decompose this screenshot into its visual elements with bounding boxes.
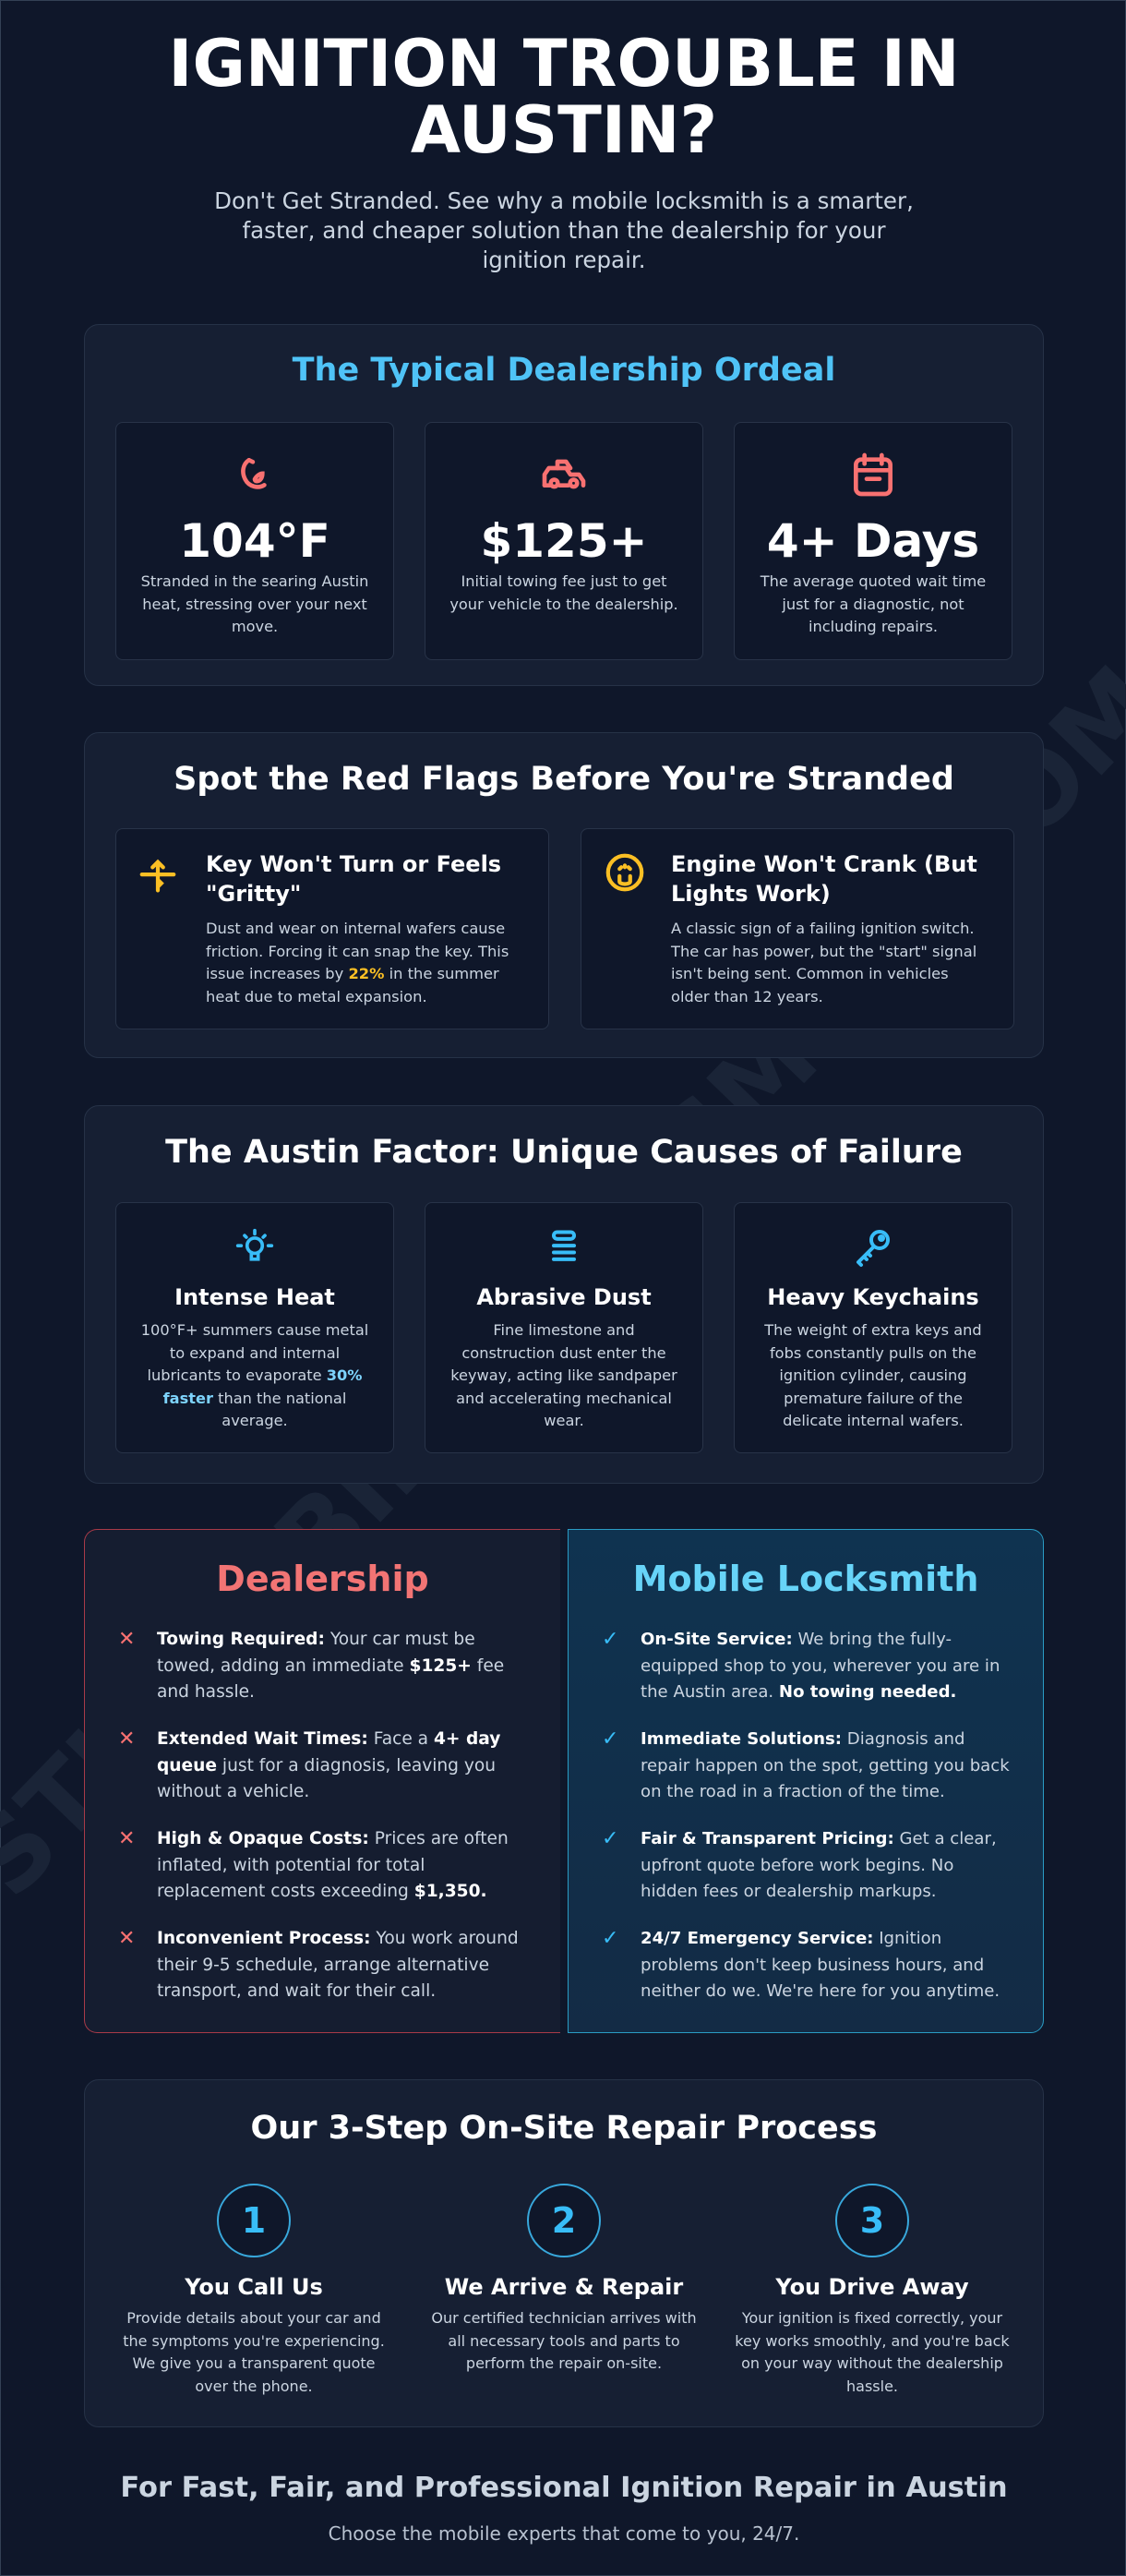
step 3 (735, 2184, 1010, 2395)
subtitle: Don't Get Stranded. See why a mobile locksmith is a smarter, faster, and cheaper solution than the dealership for your ignition repair. (214, 187, 914, 273)
text: Your ignition is fixed correctly, your key works smoothly, and you're back on your way without the dealership hassle. (735, 2309, 1010, 2395)
text: Stranded in the searing Austin heat, stressing over your next move. (141, 572, 368, 635)
icon: key turn (140, 859, 175, 892)
card: key won't turn (115, 828, 549, 1029)
card: keychains (734, 1202, 1012, 1453)
text: Dust and wear on internal wafers cause friction. Forcing it can snap the key. This issue increases by 22% in the summer heat due to metal expansion. (206, 920, 509, 1005)
item: towing: Towing Required: Your car must be towed, adding an immediate $125+ fee and hassle. (157, 1630, 504, 1702)
circle: 1 (217, 2184, 291, 2257)
card: engine won't crank (581, 828, 1014, 1029)
panel: mobile locksmith column (568, 1529, 1044, 2033)
item: wait: Extended Wait Times: Face a 4+ day queue just for a diagnosis, leaving you without a vehicle. (157, 1729, 500, 1801)
panel: dealership column: ✕ (118, 1628, 135, 1651)
step 1 (123, 2184, 385, 2395)
footer tagline: Choose the mobile experts that come to you, 24/7. (329, 2522, 799, 2545)
heading: dealership: Dealership (216, 1559, 429, 1599)
icon: tow truck (543, 460, 585, 489)
icon: calendar (854, 452, 892, 497)
heading: process: Our 3-Step On-Site Repair Process (251, 2110, 877, 2147)
item: immediate: Immediate Solutions: Diagnosis and repair happen on the spot, getting you back on the road in a fraction of the time. (641, 1729, 1010, 1801)
icon: flame (241, 458, 267, 489)
heading: Engine Won't Crank (But Lights Work) (671, 851, 977, 907)
heading: Intense Heat (174, 1284, 335, 1310)
circle: 2: 2 (552, 2200, 576, 2241)
text: Initial towing fee just to get your vehicle to the dealership. (449, 572, 678, 613)
text: 100°F+ summers cause metal to expand and internal lubricants to evaporate 30% faster than the national average. (141, 1321, 368, 1429)
item: on-site: On-Site Service: We bring the fully-equipped shop to you, wherever you are in the Austin area. No towing needed. (641, 1630, 1000, 1702)
panel: dealership column: ✕ (118, 1927, 135, 1950)
title: AUSTIN? (411, 92, 717, 168)
card: towing (425, 422, 703, 660)
panel: dealership column (84, 1529, 560, 2033)
stat: $125+: $125+ (480, 514, 648, 568)
heading: Abrasive Dust (476, 1284, 652, 1310)
heading: austin factor: The Austin Factor: Unique Causes of Failure (165, 1134, 963, 1171)
panel: mobile locksmith column: ✓ (602, 1827, 618, 1850)
text: Provide details about your car and the symptoms you're experiencing. We give you a transparent quote over the phone. (123, 2309, 385, 2395)
panel: red flags (84, 732, 1044, 1058)
panel: 3-step process (84, 2079, 1044, 2427)
heading: We Arrive & Repair (445, 2274, 683, 2300)
stat: 4+ days: 4+ Days (767, 514, 979, 568)
heading: mobile locksmith: Mobile Locksmith (633, 1559, 978, 1599)
text: A classic sign of a failing ignition switch. The car has power, but the "start" signal isn't being sent. Common in vehicles older than 12 years. (671, 920, 976, 1005)
panel: dealership ordeal (84, 324, 1044, 686)
icon: bulb (236, 1228, 273, 1261)
card: wait time (734, 422, 1012, 660)
heading: You Drive Away (775, 2274, 969, 2300)
card: heat (115, 1202, 394, 1453)
text: Fine limestone and construction dust enter the keyway, acting like sandpaper and accelerating mechanical wear. (450, 1321, 677, 1429)
panel: mobile locksmith column: ✓ (602, 1927, 618, 1950)
circle: 1: 1 (242, 2200, 266, 2241)
card: dust (425, 1202, 703, 1453)
title (168, 26, 960, 168)
icon: layers (552, 1230, 576, 1261)
text: Our certified technician arrives with all necessary tools and parts to perform the repair on-site. (431, 2309, 697, 2372)
item: pricing: Fair & Transparent Pricing: Get a clear, upfront quote before work begins. No hidden fees or dealership markups. (641, 1829, 997, 1901)
text: The weight of extra keys and fobs constantly pulls on the ignition cylinder, causing premature failure of the delicate internal wafers. (764, 1321, 982, 1429)
text: The average quoted wait time just for a diagnostic, not including repairs. (761, 572, 986, 635)
card: heat (115, 422, 394, 660)
item: 24/7: 24/7 Emergency Service: Ignition problems don't keep business hours, and neither do we. We're here for you anytime. (641, 1929, 1000, 2001)
step 2 (431, 2184, 697, 2372)
circle: 3 (835, 2184, 909, 2257)
panel: mobile locksmith column: ✓ (602, 1628, 618, 1651)
heading: You Call Us (185, 2274, 323, 2300)
item: costs: High & Opaque Costs: Prices are often inflated, with potential for total replacement costs exceeding $1,350. (157, 1829, 509, 1901)
heading: Key Won't Turn or Feels "Gritty" (206, 851, 501, 907)
heading: Heavy Keychains (767, 1284, 979, 1310)
stat: 104F: 104°F (179, 514, 330, 568)
heading: red flags: Spot the Red Flags Before You're Stranded (174, 761, 954, 798)
circle: 3: 3 (860, 2200, 884, 2241)
icon: key (856, 1230, 890, 1267)
icon: face (605, 853, 644, 892)
panel: austin factor (84, 1105, 1044, 1484)
panel: mobile locksmith column: ✓ (602, 1727, 618, 1751)
footer heading: For Fast, Fair, and Professional Ignition Repair in Austin (120, 2472, 1008, 2504)
title: IGNITION TROUBLE IN (168, 26, 960, 102)
item: process: Inconvenient Process: You work around their 9-5 schedule, arrange alternative transport, and wait for their call. (157, 1929, 519, 2001)
panel: dealership column: ✕ (118, 1827, 135, 1850)
circle: 2 (527, 2184, 601, 2257)
panel: dealership column: ✕ (118, 1727, 135, 1751)
heading: ordeal: The Typical Dealership Ordeal (293, 352, 835, 389)
